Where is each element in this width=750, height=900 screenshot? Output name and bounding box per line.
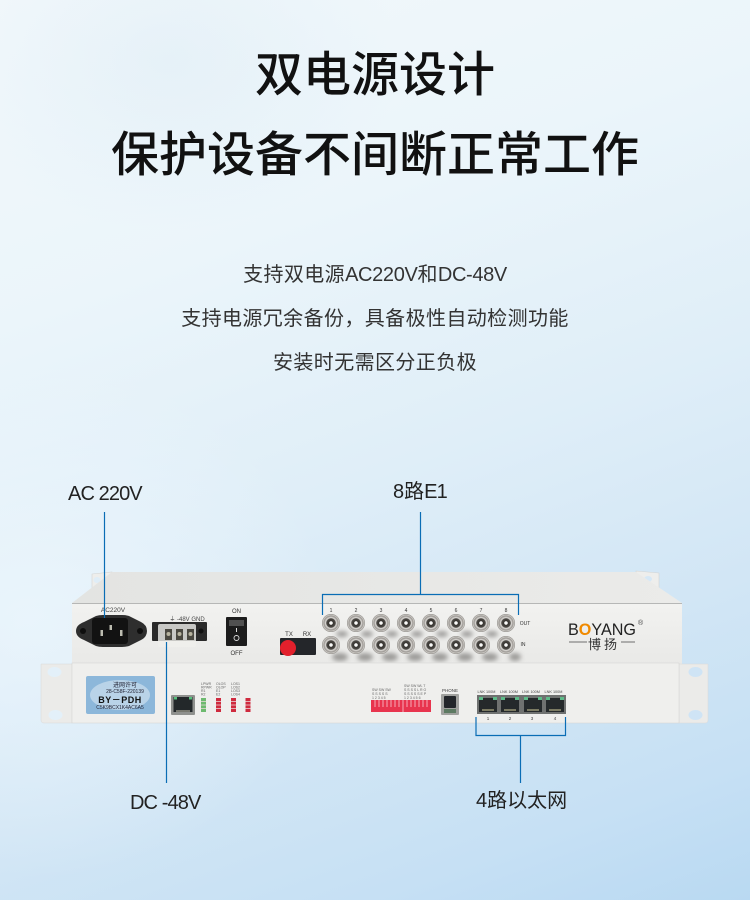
description line 3: 安装时无需区分正负极 (273, 352, 477, 374)
status LEDs: R1 (201, 689, 206, 693)
ethernet ports: 4 (554, 716, 557, 721)
ethernet ports (477, 690, 566, 721)
chassis front (72, 604, 682, 664)
status LEDs (201, 682, 250, 712)
BOYANG logo: BOYANG (568, 620, 636, 639)
E1 BNC connectors: 3 (380, 608, 383, 614)
AC power socket: AC220V (101, 607, 126, 614)
DC terminal block (152, 616, 207, 647)
DIP switches: S S S S S E P (404, 692, 427, 696)
fiber port TX RX: TX (285, 632, 293, 638)
BOYANG logo: 博扬 (588, 637, 620, 652)
status LEDs: LOS4 (231, 692, 240, 696)
anti-counterfeit sticker: 28-C58F-220139 (106, 689, 144, 695)
lower device chassis (41, 663, 708, 723)
E1 BNC connectors: 6 (455, 608, 458, 614)
DIP switches: 1 2 3 4 5 6 (404, 696, 421, 700)
anti-counterfeit sticker: C5K9BCX1K4AC6A5 (96, 705, 144, 711)
rack ear left (92, 572, 112, 590)
callout bracket: 8路E1 (322, 512, 518, 615)
description text block (181, 264, 569, 374)
ethernet ports: 2 (509, 716, 512, 721)
BOYANG logo: ® (638, 619, 644, 627)
anti-counterfeit sticker (86, 676, 155, 714)
phone port (441, 688, 459, 715)
E1 BNC connectors: 1 (330, 608, 333, 614)
DIP switches: 1 2 3 4 5 (372, 696, 386, 700)
callout bracket: 4路以太网 (476, 717, 566, 783)
upper device chassis (72, 571, 682, 664)
E1 BNC connectors: OUT (520, 621, 530, 627)
title line 1: 双电源设计 (255, 49, 495, 102)
status LEDs: RPWR (201, 686, 212, 690)
status LEDs: LPWR (201, 682, 212, 686)
anti-counterfeit sticker: 进网许可 (113, 681, 137, 689)
description line 1: 支持双电源AC220V和DC-48V (243, 264, 507, 286)
status LEDs: E2 (216, 692, 220, 696)
rack ear right (679, 664, 708, 723)
E1 BNC connectors: 4 (405, 608, 408, 614)
fiber port TX RX: RX (303, 632, 311, 638)
status LEDs: LOS3 (231, 689, 240, 693)
E1 BNC connectors: 8 (505, 608, 508, 614)
ethernet ports: LNK 100M (522, 690, 540, 694)
label: DC -48V: DC -48V (130, 792, 200, 814)
status LEDs: E1 (216, 689, 220, 693)
E1 BNC connectors: IN (520, 642, 526, 648)
chassis front (72, 663, 679, 723)
rocker switch: ON (232, 609, 241, 615)
rocker switch (226, 609, 247, 657)
E1 BNC connectors (322, 608, 530, 654)
status LEDs: OLOS (216, 682, 226, 686)
DIP switches: S S S S L R O (404, 688, 427, 692)
connector shadows (332, 631, 521, 661)
ethernet ports: 1 (487, 716, 490, 721)
status LEDs: OLOP (216, 686, 226, 690)
E1 BNC connectors: 2 (355, 608, 358, 614)
ethernet ports: LNK 100M (478, 690, 495, 694)
status LEDs: LOS1 (231, 682, 240, 686)
fiber port TX RX (280, 632, 316, 656)
rack ear left (41, 664, 72, 723)
rack ear right (636, 571, 659, 590)
phone port: PHONE (442, 688, 458, 693)
AC power socket (76, 607, 147, 647)
E1 BNC connectors: 7 (480, 608, 483, 614)
BOYANG logo (568, 619, 644, 652)
DIP switches (371, 684, 431, 712)
rocker switch: OFF (230, 651, 243, 657)
label: 4路以太网: 4路以太网 (476, 790, 567, 812)
callout line: DC -48V (166, 642, 168, 783)
callout line: AC 220V (104, 512, 106, 618)
DIP switches: S S S S S (372, 692, 388, 696)
ethernet ports: LNK 100M (500, 690, 518, 694)
title line 2: 保护设备不间断正常工作 (111, 129, 639, 182)
anti-counterfeit sticker: BY－PDH (98, 695, 142, 705)
ethernet ports: 3 (531, 716, 534, 721)
DIP switches: SW SW WL T (404, 684, 426, 688)
DC terminal block: ⏚ -48V GND (169, 616, 205, 623)
label: 8路E1: 8路E1 (393, 481, 447, 503)
E1 BNC connectors: 5 (430, 608, 433, 614)
console port (171, 695, 195, 715)
status LEDs: R2 (201, 692, 206, 696)
DIP switches: SW SW SW (372, 688, 392, 692)
label: AC 220V: AC 220V (68, 483, 142, 505)
description line 2: 支持电源冗余备份，具备极性自动检测功能 (181, 308, 569, 330)
chassis top (72, 572, 682, 603)
status LEDs: LOS2 (231, 686, 240, 690)
ethernet ports: LNK 100M (544, 690, 562, 694)
